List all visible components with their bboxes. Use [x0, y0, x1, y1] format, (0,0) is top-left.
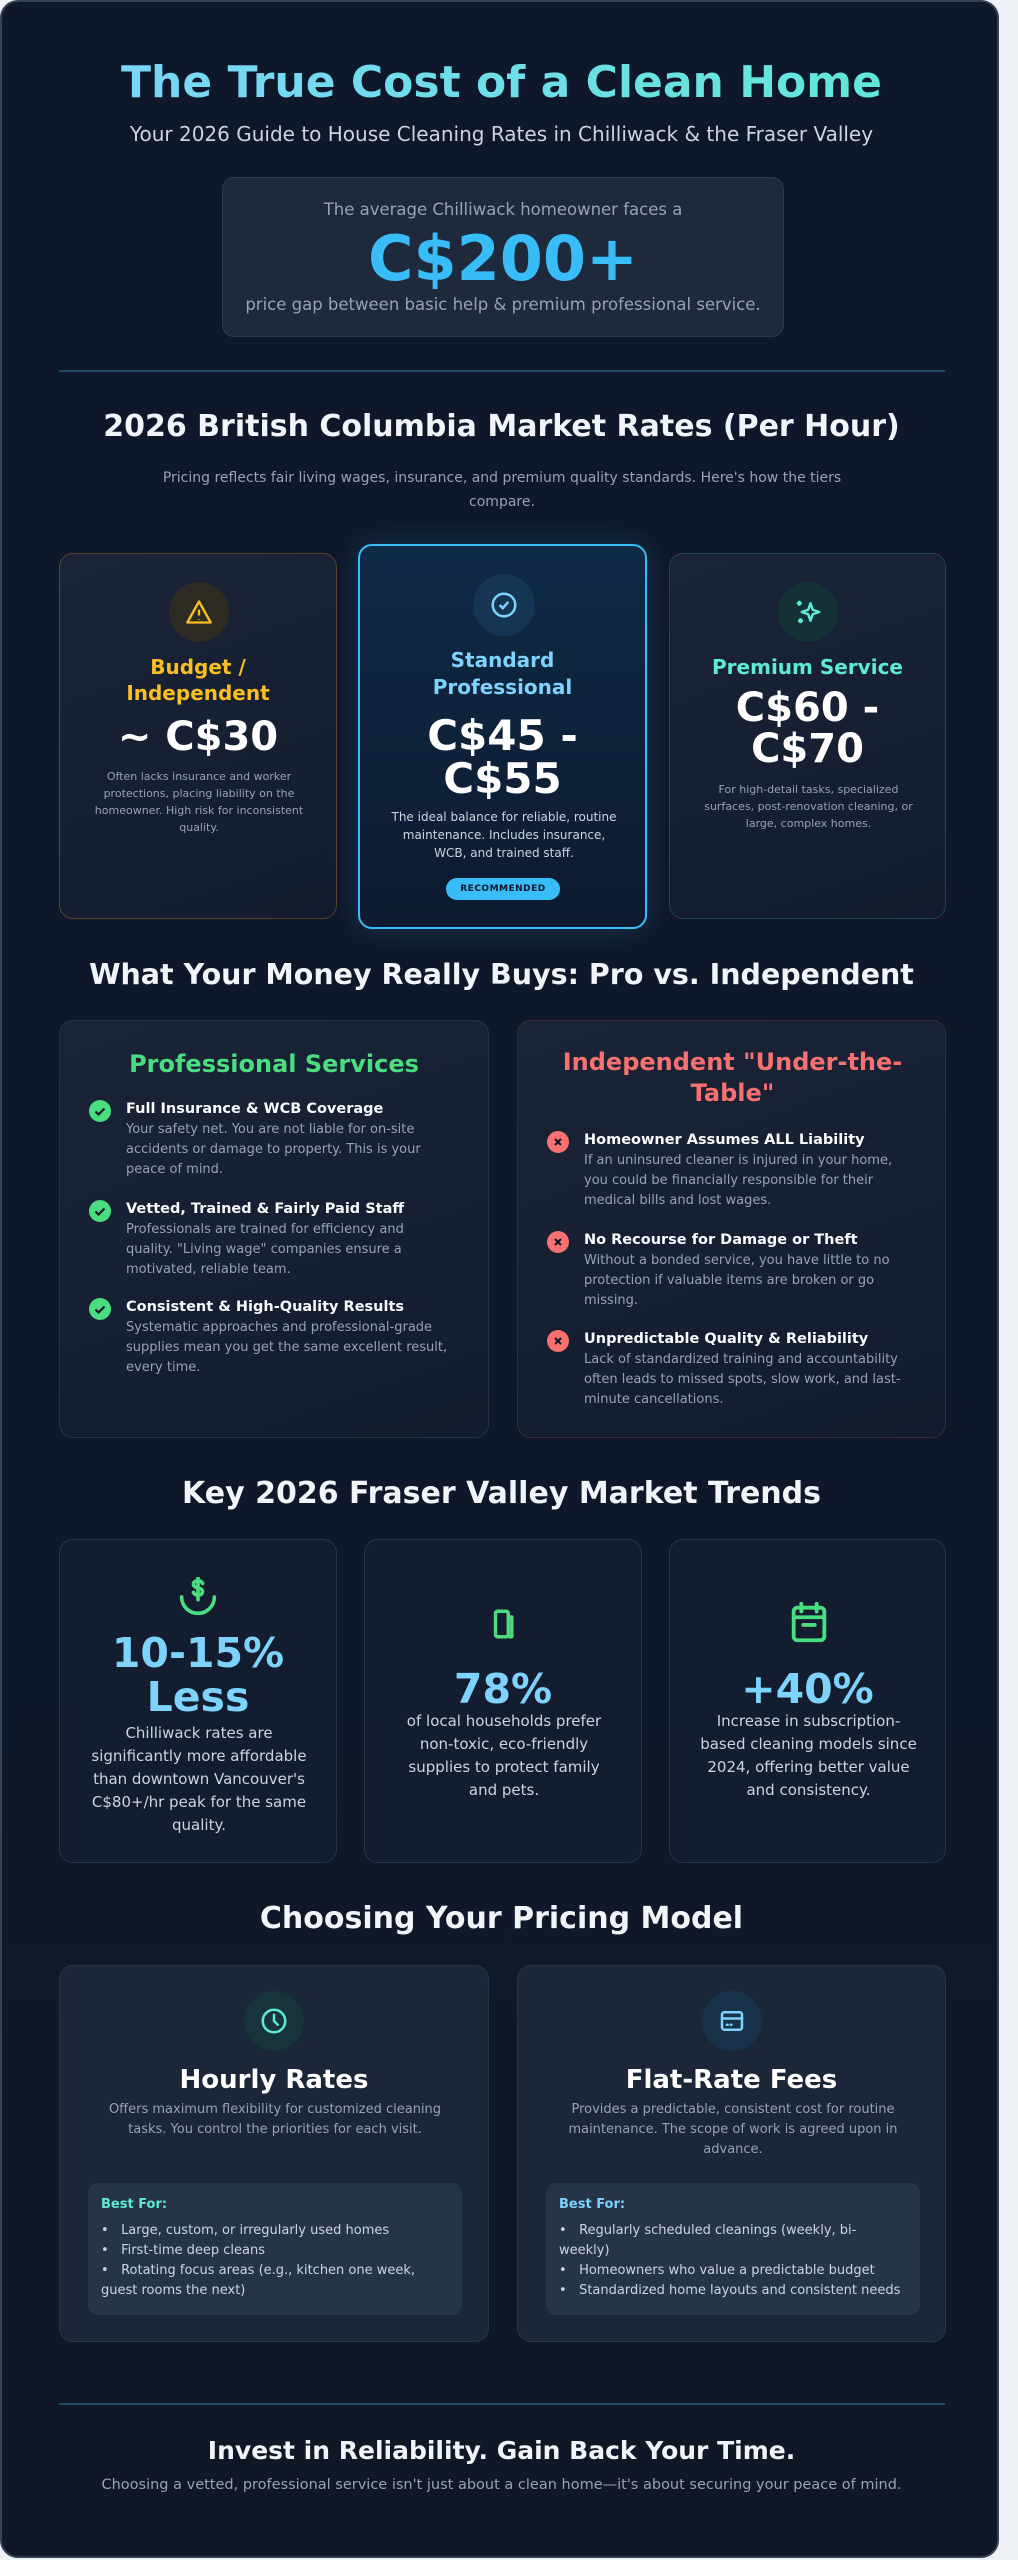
- pro item 2: [89, 1200, 404, 1277]
- tier price: C$60 -: [736, 685, 879, 731]
- panel: independent: [517, 1020, 946, 1438]
- trend card: subscriptions: [669, 1539, 946, 1863]
- tier price: C$45 -: [427, 711, 578, 760]
- panel: professional services: Full Insurance & WCB Coverage: [126, 1101, 383, 1117]
- callout big number: C$200+: [368, 222, 638, 295]
- stat description: Chilliwack rates are significantly more affordable than downtown Vancouver's C$80+/hr peak for the same quality.: [91, 1724, 307, 1834]
- stat: 10-15%: [112, 1629, 284, 1677]
- tier price: ~ C$30: [118, 714, 278, 760]
- panel: professional services: Your safety net. You are not liable for on-site accidents or damage to property. This is your peace of mind.: [126, 1122, 421, 1177]
- tier card: premium: [669, 553, 946, 919]
- heading: market trends: Key 2026 Fraser Valley Market Trends: [182, 1476, 821, 1511]
- panel: independent: Homeowner Assumes ALL Liability: [584, 1132, 865, 1148]
- card title: Hourly Rates: [180, 2065, 368, 2095]
- stat description: of local households prefer non-toxic, eco-friendly supplies to protect family and pets.: [407, 1712, 601, 1799]
- tier name: Premium Service: [712, 655, 903, 679]
- pricing card: flat-rate: [517, 1965, 946, 2342]
- rates intro text: Pricing reflects fair living wages, insurance, and premium quality standards. Here's how the tiers compare.: [163, 470, 841, 510]
- heading: pricing model: Choosing Your Pricing Model: [260, 1901, 743, 1936]
- card description: Provides a predictable, consistent cost for routine maintenance. The scope of work is agreed upon in advance.: [568, 2102, 898, 2157]
- best for box: • Large, custom, or irregularly used homes: [101, 2223, 389, 2238]
- heading: pro vs independent: What Your Money Really Buys: Pro vs. Independent: [89, 958, 914, 991]
- icon: clock: [244, 1991, 304, 2051]
- pro item 3: [89, 1298, 447, 1375]
- icon: check: [89, 1100, 111, 1122]
- trend card: eco: [364, 1539, 642, 1863]
- panel: professional services: Vetted, Trained & Fairly Paid Staff: [126, 1201, 404, 1217]
- best for box: • Rotating focus areas (e.g., kitchen one week, guest rooms the next): [101, 2263, 415, 2298]
- con item 1: [547, 1131, 892, 1208]
- tier card: standard: [358, 544, 647, 929]
- tier name: Standard: [451, 648, 554, 672]
- stat: +40%: [741, 1665, 874, 1713]
- best for box: • First-time deep cleans: [101, 2243, 265, 2258]
- best for box: [88, 2183, 462, 2315]
- tier name: Budget /: [150, 655, 246, 679]
- icon: dollar: [180, 1577, 216, 1616]
- icon: x: [547, 1330, 569, 1352]
- icon: check circle: [473, 574, 535, 636]
- icon: x: [547, 1231, 569, 1253]
- callout lead text: The average Chilliwack homeowner faces a: [324, 200, 682, 219]
- panel: independent: Without a bonded service, you have little to no protection if valuable items are broken or go missing.: [584, 1253, 890, 1308]
- tier name: [433, 648, 572, 699]
- panel title: Professional Services: [129, 1050, 419, 1078]
- tier price: [427, 711, 578, 803]
- tier price: C$70: [751, 726, 864, 772]
- card title: Flat-Rate Fees: [626, 2065, 837, 2095]
- best for box: Best For:: [559, 2197, 625, 2212]
- best for box: • Standardized home layouts and consistent needs: [559, 2283, 900, 2298]
- icon: card: [702, 1991, 762, 2051]
- footer text: Choosing a vetted, professional service isn't just about a clean home—it's about securing your peace of mind.: [101, 2477, 902, 2493]
- callout trailing text: price gap between basic help & premium professional service.: [245, 295, 761, 314]
- icon: x: [547, 1131, 569, 1153]
- tier description: For high-detail tasks, specialized surfaces, post-renovation cleaning, or large, complex homes.: [704, 783, 913, 830]
- panel: independent: If an uninsured cleaner is injured in your home, you could be financially responsible for their medical bills and lost wages.: [584, 1153, 892, 1208]
- tier description: Often lacks insurance and worker protections, placing liability on the homeowner. High risk for inconsistent quality.: [95, 770, 303, 834]
- panel: professional services: Consistent & High-Quality Results: [126, 1299, 404, 1315]
- recommended badge: RECOMMENDED: [460, 884, 546, 894]
- icon: calendar: [792, 1602, 826, 1642]
- icon: check: [89, 1200, 111, 1222]
- panel: professional services: [59, 1020, 489, 1438]
- recommended badge: [446, 878, 560, 900]
- tier name: Professional: [433, 675, 572, 699]
- icon: check: [89, 1298, 111, 1320]
- tier description: The ideal balance for reliable, routine maintenance. Includes insurance, WCB, and trained staff.: [391, 810, 617, 860]
- panel: independent: Lack of standardized training and accountability often leads to missed spots, slow work, and last-minute cancellations.: [584, 1352, 901, 1407]
- icon: bottle: [494, 1610, 514, 1638]
- tier name: [126, 655, 270, 705]
- tier price: C$55: [443, 754, 562, 803]
- best for box: [546, 2183, 920, 2315]
- panel: independent: No Recourse for Damage or Theft: [584, 1232, 858, 1248]
- icon: sparkle: [778, 582, 838, 642]
- panel: professional services: Professionals are trained for efficiency and quality. "Living wage" companies ensure a motivated, reliable team.: [126, 1222, 404, 1277]
- pricing card: hourly: [59, 1965, 489, 2342]
- tier card: budget: [59, 553, 337, 919]
- stat: Less: [147, 1673, 249, 1721]
- card description: Offers maximum flexibility for customized cleaning tasks. You control the priorities for each visit.: [109, 2102, 441, 2137]
- best for box: Best For:: [101, 2197, 167, 2212]
- subtitle: Your 2026 Guide to House Cleaning Rates in Chilliwack & the Fraser Valley: [130, 122, 873, 146]
- heading: market rates: 2026 British Columbia Market Rates (Per Hour): [103, 409, 900, 444]
- footer heading: Invest in Reliability. Gain Back Your Time.: [208, 2436, 795, 2465]
- best for box: • Regularly scheduled cleanings (weekly, bi-weekly): [559, 2223, 856, 2258]
- panel: professional services: Systematic approaches and professional-grade supplies mean you get the same excellent result, every time.: [126, 1320, 447, 1375]
- stat: [112, 1629, 284, 1721]
- title: The True Cost of a Clean Home: [121, 57, 882, 108]
- best for box: • Homeowners who value a predictable budget: [559, 2263, 875, 2278]
- stat: 78%: [454, 1665, 552, 1713]
- panel: independent: Unpredictable Quality & Reliability: [584, 1331, 868, 1347]
- trend card: affordability: [59, 1539, 337, 1863]
- tier price: [736, 685, 879, 772]
- con item 3: [547, 1330, 901, 1407]
- pro item 1: [89, 1100, 421, 1177]
- con item 2: [547, 1231, 890, 1308]
- callout: price gap: [222, 177, 784, 337]
- icon: warning: [169, 582, 229, 642]
- stat description: Increase in subscription-based cleaning models since 2024, offering better value and consistency.: [700, 1712, 917, 1799]
- panel title: Independent "Under-the-Table": [563, 1048, 902, 1107]
- tier name: Independent: [126, 681, 270, 705]
